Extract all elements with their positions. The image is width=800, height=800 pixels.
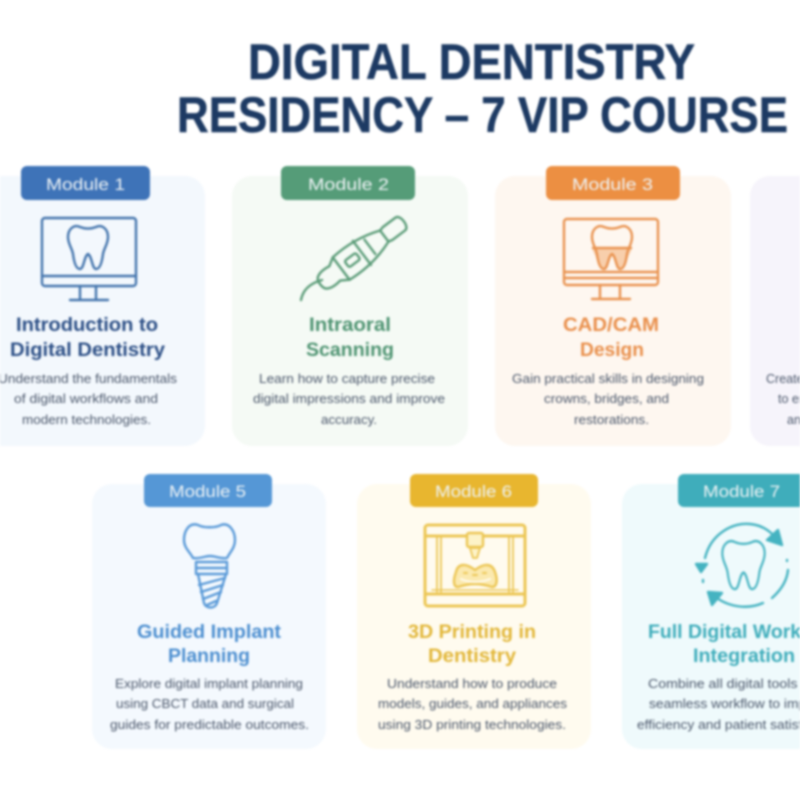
badge: module 2 [281,166,415,200]
heading: module 5: Guided Implant [137,621,282,643]
heading: module 2: Scanning [306,339,394,361]
heading: module 1: Introduction to [16,314,158,336]
description: module 7 [637,677,800,732]
badge: module 5: Module 5 [169,482,246,501]
panel: module 3 [495,166,731,446]
description: module 1: Understand the fundamentals [0,372,177,386]
badge: module 2: Module 2 [308,175,389,194]
description: module 6: models, guides, and appliances [378,697,567,711]
description: module 3: Gain practical skills in designing [512,372,704,386]
badge: module 6 [410,474,538,507]
icon: monitor with crown [564,219,658,299]
heading: module 1: Digital Dentistry [10,339,165,361]
badge: module 7 [678,474,800,507]
description: module 6 [378,677,567,732]
description: module 2 [253,372,445,427]
description: module 6: using 3D printing technologies. [378,718,566,732]
description: module 1: modern technologies. [22,413,151,427]
badge: module 3: Module 3 [572,175,653,194]
badge: module 6: Module 6 [435,482,512,501]
title [177,34,788,143]
panel: module 6 [357,474,591,749]
heading: module 5 [137,621,282,667]
heading: module 3: Design [580,339,644,361]
description: module 3: restorations. [574,413,649,427]
heading: module 6 [408,621,536,667]
badge: module 1: Module 1 [46,175,125,194]
heading: module 2: Intraoral [309,314,391,336]
panel: module 7 [622,474,800,749]
description: module 2: Learn how to capture precise [259,372,435,386]
heading: module 3 [563,314,659,361]
description: module 6: Understand how to produce [387,677,557,691]
description: module 2: digital impressions and improve [253,392,445,406]
panel: module 4 [750,176,800,446]
description: module 4 [766,372,800,427]
heading: module 6: Dentistry [428,645,516,667]
heading: module 1 [10,314,165,361]
badge: module 7: Module 7 [703,482,780,501]
description: module 2: accuracy. [321,413,377,427]
description: module 5: guides for predictable outcomes. [110,718,309,732]
badge: module 3 [546,166,680,200]
panel: module 2 [232,166,468,446]
heading: module 3: CAD/CAM [563,314,659,336]
icon: digital workflow cycle [696,524,788,607]
icon: monitor with tooth [42,218,136,300]
heading: module 7 [648,621,800,667]
panel: module 5 [92,474,326,749]
description: module 3: crowns, bridges, and [544,392,669,406]
badge: module 5 [144,474,272,507]
icon: 3D printer [425,525,525,606]
heading: module 2 [306,314,394,361]
description: module 5 [110,677,309,732]
heading: module 6: 3D Printing in [408,621,536,643]
heading: module 5: Planning [168,645,250,667]
description: module 1 [0,372,177,427]
description: module 5: Explore digital implant planning [115,677,303,691]
icon: dental implant [184,524,235,608]
description: module 1: of digital workflows and [14,392,158,406]
panel: module 1 [0,166,205,446]
icon: intraoral scanner [301,209,413,300]
description: module 3 [512,372,704,427]
heading: module 7: Integration [693,645,795,667]
badge: module 1 [21,166,150,200]
description: module 5: using CBCT data and surgical [116,697,294,711]
title: DIGITAL DENTISTRY [248,34,695,90]
